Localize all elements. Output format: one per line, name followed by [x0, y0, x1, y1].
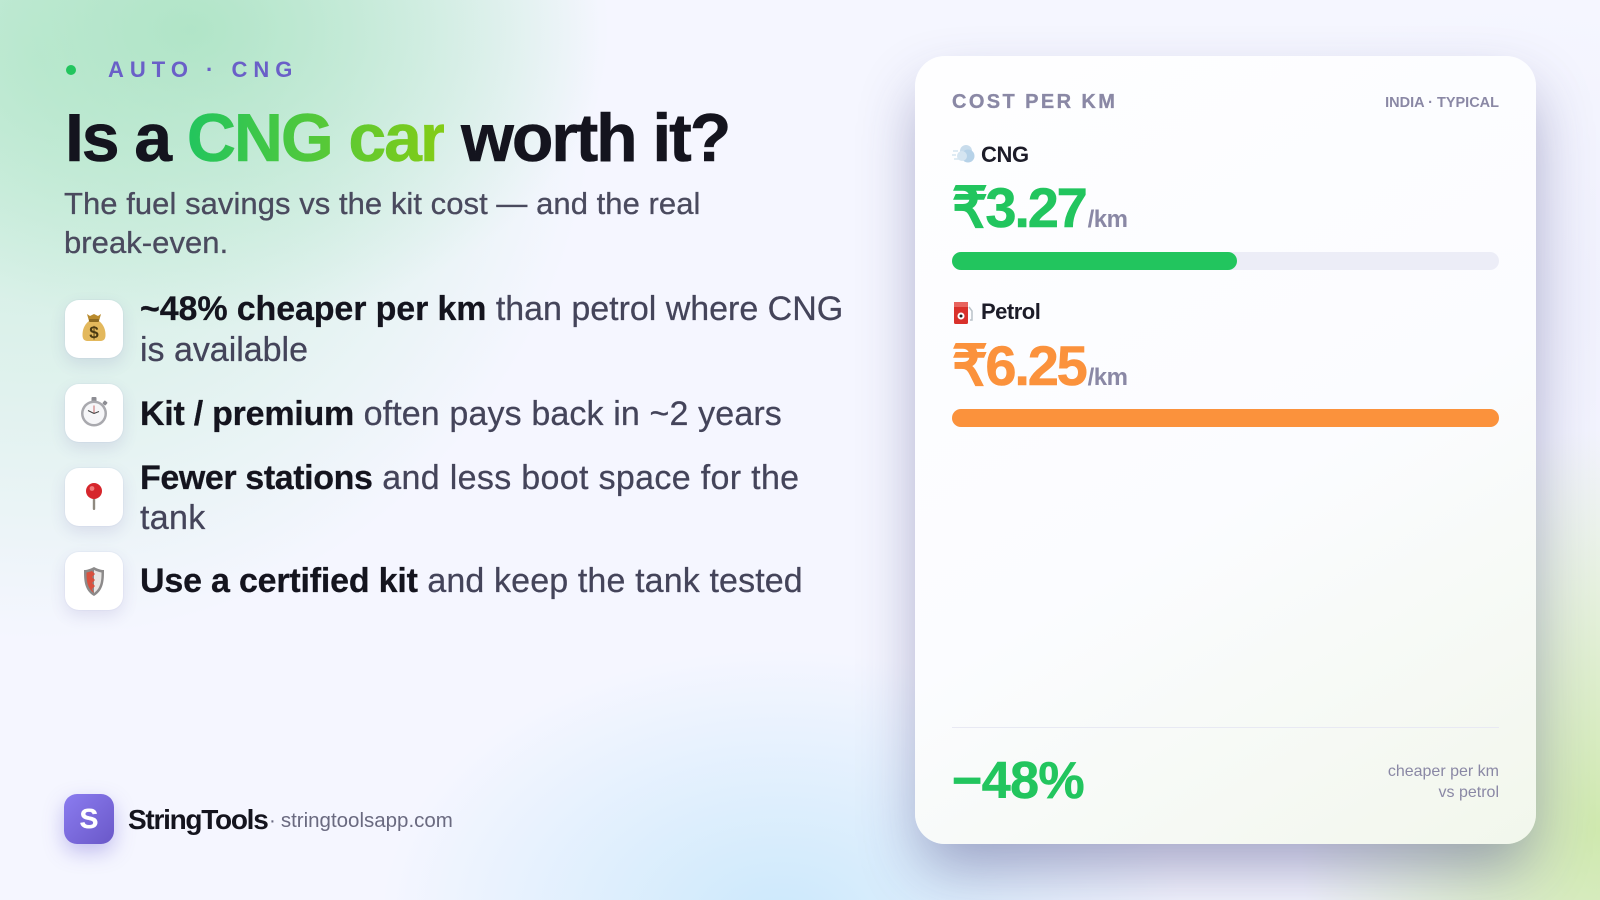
- CNG bar: [952, 252, 1499, 270]
- list item: stations: tank: [140, 499, 206, 537]
- eyebrow: AUTO · CNG: [108, 57, 298, 82]
- title: Is a CNG car worth it?: [65, 100, 729, 176]
- icon: stopwatch: [65, 384, 123, 442]
- icon: money bag: $: [89, 323, 99, 342]
- savings figure: −48%: [952, 752, 1084, 810]
- icon: dash cloud: [952, 145, 974, 162]
- list item: savings: ~48% cheaper per km than petrol where CNG: [140, 290, 843, 328]
- logo: S: [80, 803, 98, 834]
- brand name: StringTools: [128, 804, 268, 835]
- savings caption: vs petrol: [1439, 784, 1499, 801]
- region note: INDIA · TYPICAL: [1385, 95, 1499, 111]
- subtitle: [64, 186, 700, 260]
- savings caption: [1388, 763, 1499, 801]
- list item: payback: Kit / premium often pays back in ~2 years: [140, 395, 782, 433]
- CNG price: ₹3.27/km: [952, 176, 1127, 239]
- icon: money bag: [65, 300, 123, 358]
- Petrol label: Petrol: [981, 299, 1040, 324]
- Petrol price: ₹6.25/km: [952, 334, 1127, 397]
- list item: savings: [140, 290, 843, 369]
- icon: shield: [65, 552, 123, 610]
- subtitle: The fuel savings vs the kit cost — and the real: [64, 186, 700, 221]
- panel: cost per km: [915, 56, 1536, 844]
- list item: certified: Use a certified kit and keep the tank tested: [140, 562, 803, 600]
- list item: savings: is available: [140, 331, 308, 369]
- icon: fuel pump: [954, 302, 973, 324]
- domain: ·stringtoolsapp.com: [269, 809, 453, 832]
- Petrol bar: [952, 409, 1499, 427]
- brand footer: [54, 792, 453, 862]
- list item: stations: [140, 459, 799, 537]
- savings caption: cheaper per km: [1388, 763, 1499, 780]
- logo: [64, 794, 114, 844]
- panel heading: COST PER KM: [952, 91, 1117, 113]
- divider: [952, 727, 1499, 728]
- list item: stations: Fewer stations and less boot space for the: [140, 459, 799, 497]
- subtitle: break-even.: [64, 225, 228, 260]
- CNG label: CNG: [981, 142, 1029, 167]
- icon: round pushpin: [65, 468, 123, 526]
